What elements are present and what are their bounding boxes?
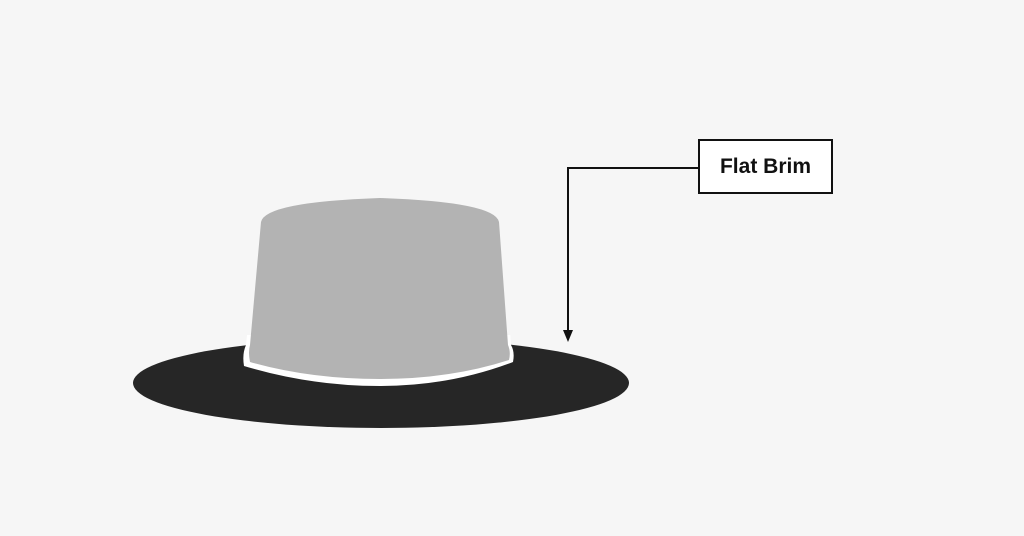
brim <box>133 338 629 428</box>
arrow <box>563 168 698 342</box>
hat illustration <box>133 167 698 428</box>
crown <box>249 198 510 379</box>
label: Flat Brim: Flat Brim <box>720 154 811 178</box>
crown outline <box>243 335 514 386</box>
label: Flat Brim <box>698 139 833 194</box>
hat <box>133 198 629 428</box>
